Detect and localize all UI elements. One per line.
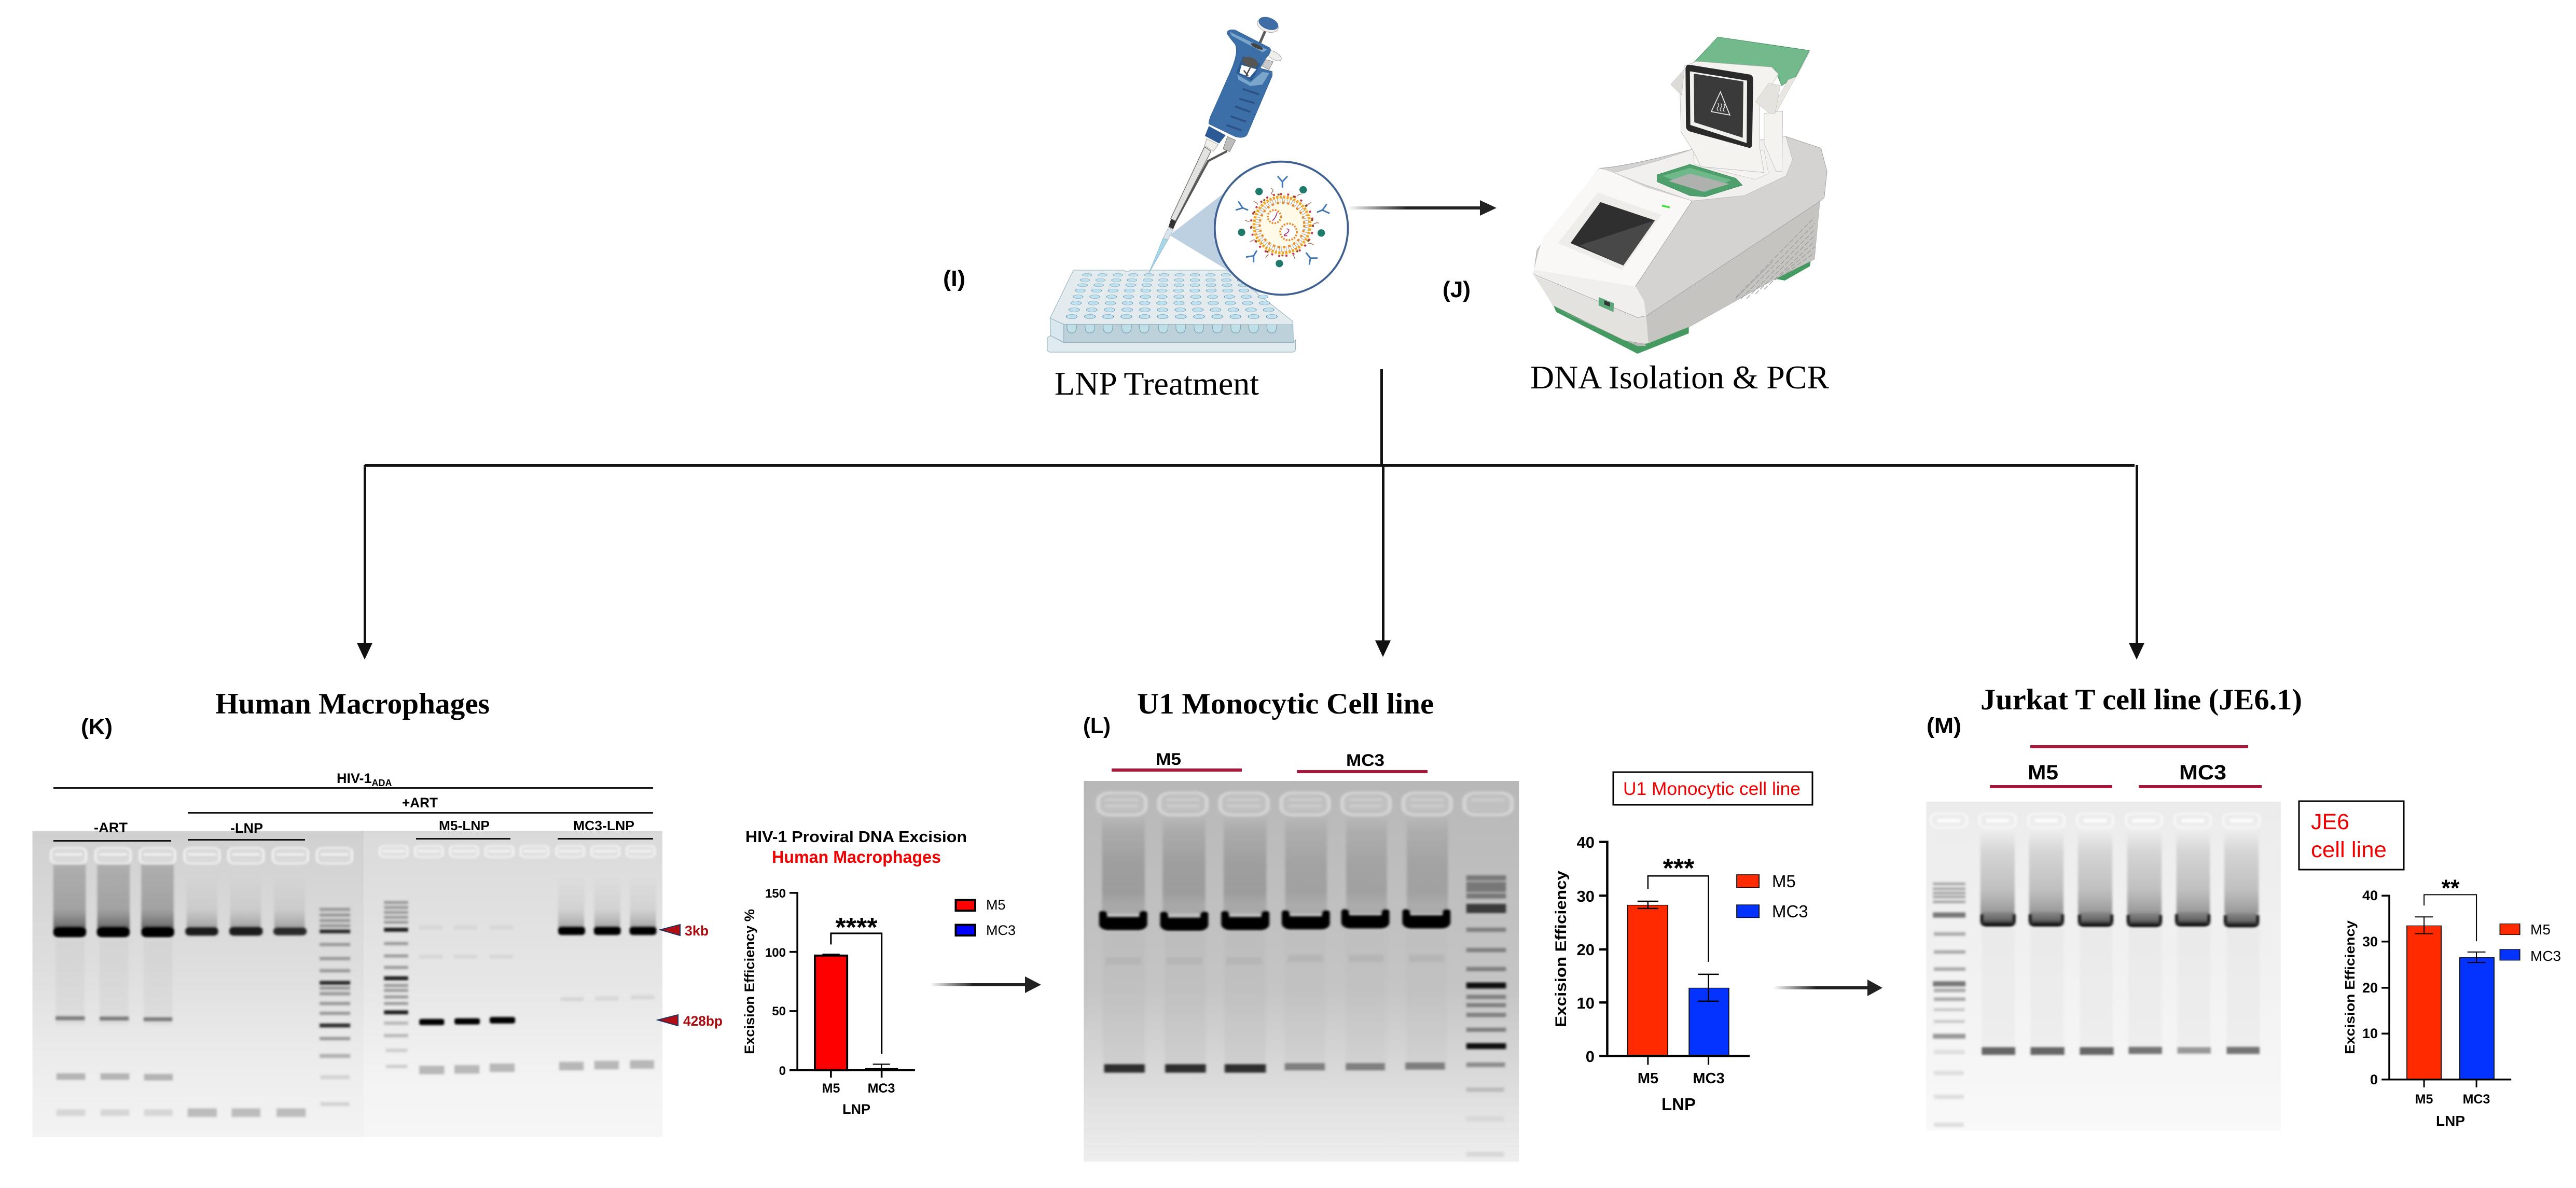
caption: DNA Isolation and PCR: DNA Isolation & PCR bbox=[1530, 359, 1829, 396]
icon: 96-well plate bbox=[1047, 270, 1296, 352]
bar chart: Jurkat excision bbox=[2342, 875, 2561, 1129]
y tick labels: 0 bbox=[779, 1064, 786, 1078]
heading: Human Macrophages: Human Macrophages bbox=[215, 688, 490, 720]
arrow: macrophages to U1 bbox=[930, 976, 1041, 993]
lane label: MC3: MC3 bbox=[2179, 761, 2226, 784]
x tick labels bbox=[1638, 1070, 1725, 1087]
lane label: M5-LNP: M5-LNP bbox=[439, 818, 490, 833]
bracket line: M5-LNP bbox=[416, 838, 510, 840]
y tick labels bbox=[1577, 833, 1595, 1066]
gel image: macrophages bbox=[33, 831, 662, 1137]
arrow: LNP treatment to PCR bbox=[1347, 200, 1497, 216]
icon: magnification cone bbox=[1170, 190, 1227, 270]
x axis title: LNP bbox=[2436, 1113, 2465, 1129]
bar chart: macrophages excision bbox=[742, 828, 1016, 1117]
boxed label: JE6 cell line: cell line bbox=[2311, 837, 2387, 862]
ladder bands bbox=[320, 910, 350, 1039]
x tick labels: M5 bbox=[1638, 1070, 1658, 1087]
bracket line: +ART bbox=[188, 812, 653, 814]
y tick labels: 40 bbox=[1577, 833, 1595, 851]
icon: PCR thermocycler bbox=[1534, 37, 1827, 354]
y tick labels: 40 bbox=[2362, 888, 2378, 903]
lane label: M5: M5 bbox=[1156, 750, 1181, 768]
bracket line: -ART bbox=[53, 840, 171, 842]
bracket line: M5 bbox=[1990, 785, 2112, 788]
y tick labels: 0 bbox=[2370, 1072, 2378, 1087]
panel I: LNP treatment illustration bbox=[1047, 15, 1348, 352]
legend bbox=[2530, 921, 2561, 964]
bar chart: U1 excision bbox=[1553, 833, 1808, 1114]
y tick labels bbox=[2362, 888, 2378, 1087]
significance stars: *** bbox=[1663, 854, 1695, 884]
label (I): (I) bbox=[943, 266, 965, 291]
y axis title: Excision Efficiency bbox=[2342, 920, 2358, 1054]
y tick labels: 0 bbox=[1586, 1047, 1595, 1066]
panel K: Human Macrophages bbox=[33, 688, 1016, 1137]
y tick labels: 50 bbox=[772, 1004, 786, 1018]
bracket line: -LNP bbox=[188, 839, 305, 841]
legend bbox=[986, 897, 1016, 938]
significance stars: **** bbox=[836, 913, 878, 943]
y tick labels: 100 bbox=[765, 946, 786, 960]
lane label: MC3: MC3 bbox=[1346, 751, 1384, 770]
x tick labels: MC3 bbox=[1693, 1070, 1725, 1087]
icon: LNP magnified circle bbox=[1215, 162, 1348, 295]
label (K): (K) bbox=[81, 715, 113, 739]
bracket line: HIV-1 ADA bbox=[53, 787, 653, 789]
bracket line: MC3-LNP bbox=[558, 838, 653, 840]
significance stars: ** bbox=[2441, 875, 2460, 901]
panel L: U1 Monocytic Cell line bbox=[1083, 688, 1812, 1162]
legend: MC3 bbox=[2530, 948, 2561, 964]
boxed label: U1 Monocytic cell line bbox=[1613, 772, 1812, 805]
x tick labels bbox=[822, 1081, 895, 1096]
y tick labels: 150 bbox=[765, 887, 786, 901]
ladder bands bbox=[1933, 884, 1965, 902]
x tick labels: MC3 bbox=[868, 1081, 895, 1096]
lane label: MC3-LNP: MC3-LNP bbox=[573, 818, 634, 833]
boxed label: U1 Monocytic cell line: U1 Monocytic cell line bbox=[1623, 779, 1801, 799]
group label: HIV-1 ADA: HIV-1 bbox=[337, 771, 372, 786]
x tick labels: M5 bbox=[822, 1081, 840, 1096]
y tick labels: 10 bbox=[2362, 1026, 2378, 1041]
legend: M5 bbox=[1772, 872, 1796, 891]
group label: HIV-1 ADA: ADA bbox=[372, 778, 392, 788]
bars and axes bbox=[790, 893, 975, 1078]
marker: 428bp: 428bp bbox=[683, 1013, 723, 1029]
bracket line: MC3 bbox=[2139, 785, 2262, 788]
y tick labels: 20 bbox=[1577, 941, 1595, 959]
chart title: HIV-1 Proviral DNA Excision bbox=[745, 828, 967, 846]
icon: pipette bbox=[1149, 15, 1283, 273]
marker: 3kb bbox=[660, 923, 709, 939]
y tick labels: 10 bbox=[1577, 994, 1595, 1012]
label (J): (J) bbox=[1443, 277, 1471, 302]
x tick labels bbox=[2415, 1092, 2490, 1107]
x axis title: LNP bbox=[1661, 1095, 1696, 1114]
boxed label: JE6 cell line: JE6 bbox=[2311, 809, 2349, 834]
gel image: U1 bbox=[1084, 781, 1519, 1162]
marker: 428bp bbox=[658, 1013, 723, 1029]
panel J: PCR thermocycler illustration bbox=[1534, 37, 1827, 354]
ladder bands bbox=[1466, 878, 1506, 896]
y axis title: Excision Efficiency % bbox=[742, 909, 757, 1054]
y tick labels bbox=[765, 887, 786, 1078]
legend: MC3 bbox=[1772, 902, 1808, 921]
panel M: Jurkat T cell line bbox=[1926, 683, 2561, 1130]
bars and axes bbox=[2381, 895, 2520, 1087]
x axis title: LNP bbox=[842, 1101, 870, 1117]
y tick labels: 30 bbox=[2362, 934, 2378, 949]
chart subtitle: Human Macrophages bbox=[772, 847, 941, 866]
y tick labels: 30 bbox=[1577, 887, 1595, 905]
bracket line: MC3 bbox=[1297, 770, 1428, 773]
legend: M5 bbox=[2530, 921, 2551, 938]
arrow: U1 to Jurkat bbox=[1773, 980, 1882, 996]
y axis title: Excision Efficiency bbox=[1553, 871, 1570, 1027]
group label: +ART: +ART bbox=[402, 795, 438, 810]
bars and axes bbox=[1599, 842, 1759, 1065]
caption: LNP Treatment: LNP Treatment bbox=[1055, 366, 1259, 402]
lane label: -ART: -ART bbox=[94, 820, 128, 835]
legend: M5 bbox=[986, 897, 1006, 913]
x tick labels: M5 bbox=[2415, 1092, 2433, 1107]
gel image: Jurkat bbox=[1926, 802, 2281, 1130]
bracket line: M5 bbox=[1112, 768, 1242, 772]
heading: U1 Monocytic Cell line: U1 Monocytic Cell line bbox=[1137, 688, 1434, 720]
lane label: M5: M5 bbox=[2028, 761, 2058, 784]
legend: MC3 bbox=[986, 923, 1016, 938]
heading: Jurkat T cell line (JE6.1): Jurkat T cell line (JE6.1) bbox=[1981, 683, 2302, 716]
arrow: branching tree to three cell models bbox=[357, 369, 2144, 660]
boxed label: JE6 cell line bbox=[2299, 801, 2404, 870]
label (L): (L) bbox=[1083, 714, 1111, 738]
marker: 3kb: 3kb bbox=[685, 923, 709, 939]
label (M): (M) bbox=[1927, 714, 1961, 738]
top bracket line bbox=[2030, 745, 2248, 748]
x tick labels: MC3 bbox=[2463, 1092, 2490, 1107]
lane label: -LNP: -LNP bbox=[230, 820, 263, 836]
y tick labels: 20 bbox=[2362, 980, 2378, 996]
legend bbox=[1772, 872, 1808, 921]
